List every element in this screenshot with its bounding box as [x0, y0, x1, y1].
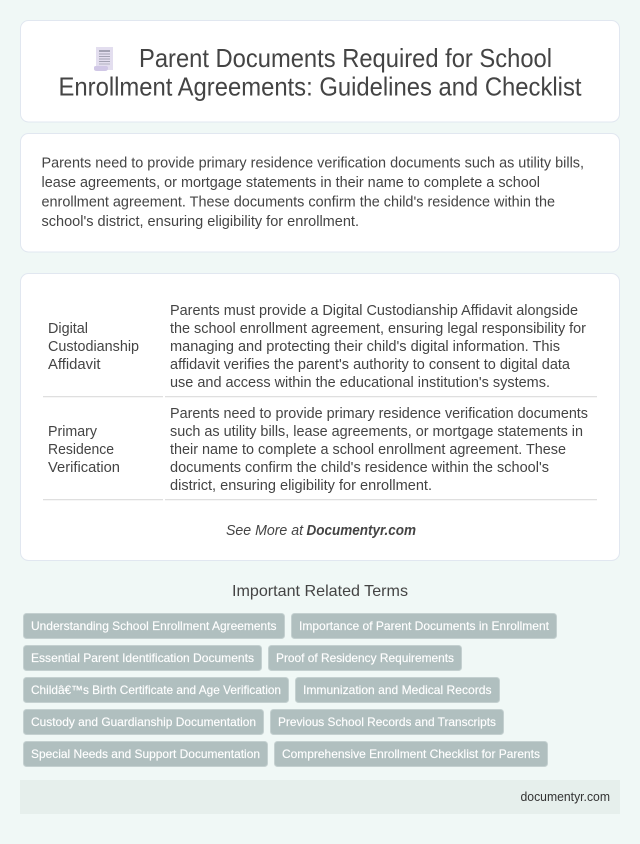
heading: important related terms: Important Related Terms — [232, 583, 408, 600]
tag: Understanding School Enrollment Agreements — [31, 619, 276, 633]
icon: document receipt scroll — [94, 47, 113, 71]
tag — [292, 614, 556, 638]
tag — [270, 710, 504, 734]
tag: Immunization and Medical Records — [303, 683, 492, 697]
panel: title card — [20, 20, 620, 122]
summary paragraph — [42, 156, 584, 230]
tag — [24, 742, 268, 766]
row label — [48, 321, 139, 373]
summary paragraph: enrollment agreement. These documents confirm the child's residence within the — [42, 194, 555, 210]
tag — [24, 614, 284, 638]
footer site name: documentyr.com — [520, 789, 610, 804]
row label: Primary — [48, 424, 98, 440]
row label: Residence — [48, 442, 114, 458]
tag — [268, 646, 462, 670]
row description: affidavit verifies the parent's authority to consent to digital data — [170, 357, 570, 373]
row description: such as utility bills, lease agreements, or mortgage statements in — [170, 424, 583, 440]
summary paragraph: school's district, ensuring eligibility for enrollment. — [42, 214, 359, 230]
row label: Affidavit — [48, 357, 100, 373]
tag — [24, 678, 288, 702]
panel: summary card — [20, 134, 620, 252]
row description: managing and protecting their child's digital information. This — [170, 339, 560, 355]
footer bar — [20, 780, 620, 814]
title: Enrollment Agreements: Guidelines and Checklist — [58, 74, 582, 102]
tag: Importance of Parent Documents in Enrollment — [299, 619, 550, 633]
related term tags — [24, 614, 556, 766]
row description: the school enrollment agreement, ensuring legal responsibility for — [170, 321, 586, 337]
title: Parent Documents Required for School — [139, 45, 552, 73]
tag — [274, 742, 548, 766]
row label: Custodianship — [48, 339, 139, 355]
summary paragraph: Parents need to provide primary residence verification documents such as utility bills, — [42, 156, 584, 172]
row label — [48, 424, 120, 476]
tag: Childâ€™s Birth Certificate and Age Verification — [31, 683, 281, 697]
tag — [296, 678, 500, 702]
row description: Parents must provide a Digital Custodianship Affidavit alongside — [170, 303, 578, 319]
summary paragraph: lease agreements, or mortgage statements in their name to complete a school — [42, 175, 540, 191]
see more link — [226, 523, 416, 539]
row description: use and access within the educational institution's systems. — [170, 375, 550, 391]
row description: Parents need to provide primary residence verification documents — [170, 406, 588, 422]
row label: Digital — [48, 321, 88, 337]
tag: Previous School Records and Transcripts — [278, 715, 496, 729]
title — [58, 45, 582, 102]
tag — [24, 646, 262, 670]
see more link: See More at — [226, 523, 304, 539]
row description — [170, 303, 586, 391]
row label: Verification — [48, 460, 120, 476]
tag: Essential Parent Identification Documents — [31, 651, 254, 665]
tag: Comprehensive Enrollment Checklist for Parents — [282, 747, 540, 761]
row description: their name to complete a school enrollment agreement. These — [170, 442, 566, 458]
row description — [170, 406, 588, 494]
row description: district, ensuring eligibility for enrollment. — [170, 478, 432, 494]
row description: documents confirm the child's residence within the school's — [170, 460, 549, 476]
panel: document table card — [20, 274, 620, 560]
tag: Proof of Residency Requirements — [276, 651, 454, 665]
tag — [24, 710, 264, 734]
table row: Primary Residence Verification — [48, 406, 588, 494]
tag: Special Needs and Support Documentation — [31, 747, 260, 761]
see more link: Documentyr.com — [306, 523, 416, 539]
tag: Custody and Guardianship Documentation — [31, 715, 256, 729]
table row: Digital Custodianship Affidavit — [48, 303, 586, 391]
